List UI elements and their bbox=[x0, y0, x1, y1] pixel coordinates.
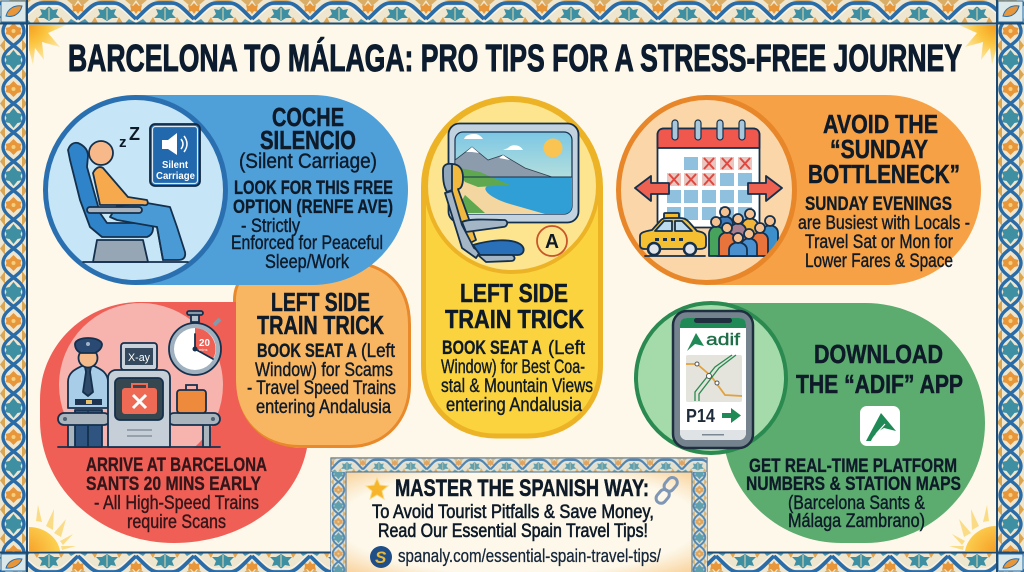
text block: BOOK SEAT A bbox=[442, 338, 542, 359]
station map bbox=[686, 355, 742, 402]
text block bbox=[798, 109, 970, 272]
crowd bbox=[709, 207, 778, 256]
text block bbox=[441, 278, 593, 416]
text block: entering Andalusia bbox=[446, 395, 582, 416]
calendar bbox=[658, 120, 760, 228]
icon: calendar, taxi and crowd bbox=[618, 98, 794, 282]
text block bbox=[372, 502, 654, 542]
taxi bbox=[640, 213, 706, 256]
icon: chain link bbox=[654, 475, 679, 505]
text block: ARRIVE AT BARCELONA bbox=[86, 455, 267, 476]
callout: master the spanish way bbox=[331, 458, 707, 572]
text block: body: Málaga Zambrano) bbox=[788, 511, 925, 532]
text block: SUNDAY EVENINGS bbox=[805, 194, 952, 215]
conveyor bbox=[58, 413, 220, 447]
icon: sleeping passenger in seat: Z bbox=[129, 124, 140, 144]
text block: “SUNDAY bbox=[830, 134, 928, 164]
icon: phone with adif app bbox=[636, 303, 786, 453]
panel: coche silencio (blue) bbox=[46, 95, 408, 285]
text block: SANTS 20 MINS EARLY bbox=[86, 474, 261, 495]
text block: Window) for Scams bbox=[255, 360, 393, 381]
text block: (Left bbox=[361, 341, 396, 362]
text block: (Silent Carriage) bbox=[239, 150, 377, 173]
luggage bbox=[177, 385, 206, 413]
text block: LEFT SIDE bbox=[460, 278, 568, 308]
icon: security scanner scene bbox=[57, 303, 223, 448]
text block: AVOID THE bbox=[823, 109, 938, 139]
text block: body: NUMBERS & STATION MAPS bbox=[746, 474, 961, 495]
text block: - All High-Speed Trains bbox=[94, 493, 259, 514]
text block: TRAIN TRICK bbox=[445, 304, 584, 334]
text block: require Scans bbox=[127, 512, 226, 533]
text block: body: GET REAL-TIME PLATFORM bbox=[749, 456, 957, 477]
text block: heading: THE “ADIF” APP bbox=[796, 369, 963, 399]
stopwatch: 20 bbox=[199, 338, 210, 349]
x-ray monitor: X-ay bbox=[128, 352, 150, 364]
icon: sun top left bbox=[29, 25, 66, 65]
text block: entering Andalusia bbox=[256, 397, 391, 418]
arrows bbox=[635, 176, 782, 201]
panel shape bbox=[706, 95, 981, 285]
panel: left side train trick (yellow) bbox=[424, 99, 600, 436]
text block: Travel Sat or Mon for bbox=[805, 232, 954, 253]
text block: LOOK FOR THIS FREE bbox=[234, 178, 393, 199]
text block: SILENCIO bbox=[260, 125, 356, 155]
text block: stal & Mountain Views bbox=[441, 376, 593, 397]
icon: guard bbox=[68, 338, 108, 447]
icon: sleeping passenger in seat bbox=[46, 98, 226, 282]
text block: Window) for Best Coa- bbox=[441, 357, 585, 378]
x-ray monitor bbox=[121, 343, 157, 370]
icon: star bbox=[366, 478, 388, 499]
panel: download adif app (green) bbox=[636, 303, 985, 543]
text block: TRAIN TRICK bbox=[257, 310, 384, 340]
text block: - Travel Speed Trains bbox=[247, 378, 396, 399]
text block: Lower Fares & Space bbox=[805, 251, 953, 272]
text block: Sleep/Work bbox=[265, 252, 349, 273]
adif logo bbox=[687, 333, 704, 351]
panel: left side train trick (orange, small) bbox=[234, 262, 410, 446]
text block bbox=[86, 455, 267, 533]
text block: body: (Barcelona Sants & bbox=[788, 493, 925, 514]
text block: COCHE bbox=[272, 102, 344, 132]
icon: phone with adif app: adif bbox=[706, 330, 740, 349]
icon: silent carriage sign: Silent bbox=[162, 160, 189, 171]
panel shape bbox=[136, 95, 408, 285]
icon: spanaly logo bbox=[370, 546, 392, 568]
icon: spanaly logo: S bbox=[375, 548, 387, 567]
text block: are Busiest with Locals - bbox=[798, 213, 970, 234]
text block: Read Our Essential Spain Travel Tips! bbox=[378, 521, 648, 542]
panel shape bbox=[234, 262, 410, 446]
text block: (Left bbox=[548, 338, 586, 359]
panel shape bbox=[424, 99, 600, 436]
callout frame bbox=[331, 458, 707, 572]
link text: spanaly.com/essential-spain-travel-tips/ bbox=[398, 546, 661, 566]
panel: arrive early (red) bbox=[40, 302, 307, 543]
text block: To Avoid Tourist Pitfalls & Save Money, bbox=[372, 502, 654, 523]
heading: MASTER THE SPANISH WAY: bbox=[395, 475, 649, 502]
text block: OPTION (RENFE AVE) bbox=[233, 197, 393, 218]
icon: silent carriage sign: Carriage bbox=[156, 171, 195, 182]
panel: avoid the sunday bottleneck (orange) bbox=[618, 95, 981, 285]
icon: silent carriage sign bbox=[150, 124, 200, 186]
icon: sun bottom left bbox=[29, 505, 76, 551]
text block: heading: DOWNLOAD bbox=[814, 339, 943, 369]
icon: adif app tile bbox=[860, 406, 900, 446]
text block: BOTTLENECK” bbox=[808, 159, 960, 189]
text block bbox=[231, 102, 393, 273]
icon: window seat with coastal view: A bbox=[545, 231, 559, 253]
text block: body bbox=[746, 456, 961, 532]
panel shape bbox=[711, 303, 985, 543]
icon: sun top right bbox=[959, 25, 996, 65]
text block: BOOK SEAT A bbox=[257, 341, 357, 362]
icon: sleeping passenger in seat: z bbox=[119, 134, 126, 151]
scanner bbox=[108, 370, 170, 447]
stopwatch bbox=[169, 311, 221, 375]
icon: phone with adif app: P14 bbox=[686, 406, 715, 426]
panel shape bbox=[40, 302, 307, 543]
icon: sun bottom right bbox=[949, 505, 996, 551]
text block: heading bbox=[796, 339, 963, 399]
text block: - Strictly bbox=[241, 216, 300, 237]
text block: LEFT SIDE bbox=[271, 287, 370, 317]
text block: Enforced for Peaceful bbox=[231, 233, 383, 254]
text block bbox=[247, 287, 396, 418]
icon: window seat with coastal view bbox=[426, 100, 598, 272]
stopwatch: mins bbox=[199, 347, 207, 352]
